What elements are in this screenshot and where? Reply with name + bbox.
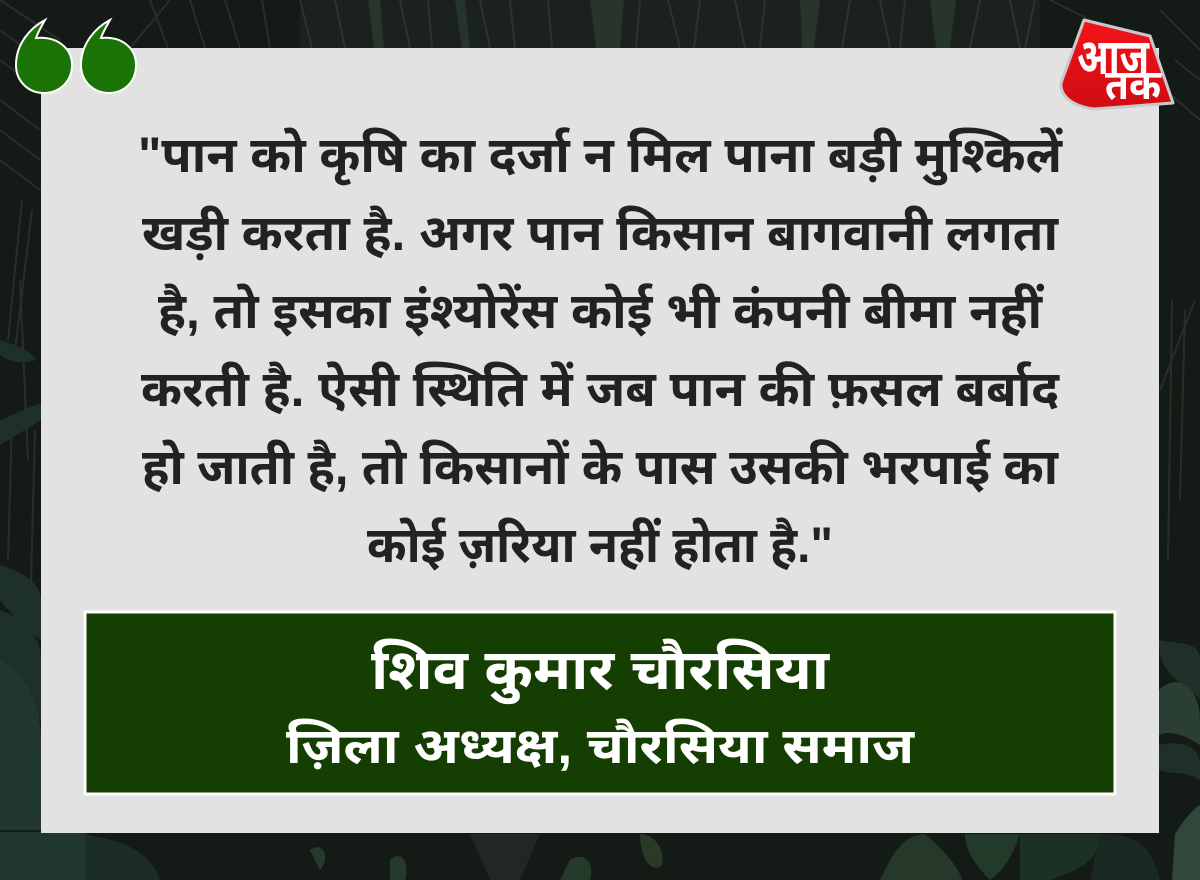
logo: Aaj Tak: तक (1105, 61, 1162, 108)
logo: Aaj Tak: आज (1077, 29, 1150, 85)
quote text: कोई ज़रिया नहीं होता है." (367, 517, 833, 573)
speaker title: ज़िला अध्यक्ष, चौरसिया समाज (286, 718, 916, 774)
quote text: करती है. ऐसी स्थिति में जब पान की फ़सल बर्बाद (141, 361, 1060, 417)
quote text (138, 127, 1063, 573)
quote text: खड़ी करता है. अगर पान किसान बागवानी लगता (142, 205, 1059, 261)
name banner (85, 612, 1115, 794)
speaker name: शिव कुमार चौरसिया (371, 638, 831, 705)
logo: Aaj Tak (1061, 20, 1173, 109)
icon: quotation marks (16, 20, 136, 93)
quote text: है, तो इसका इंश्योरेंस कोई भी कंपनी बीमा नहीं (158, 283, 1044, 339)
quote text: हो जाती है, तो किसानों के पास उसकी भरपाई का (142, 439, 1059, 495)
quote text: "पान को कृषि का दर्जा न मिल पाना बड़ी मुश्किलें (138, 127, 1063, 187)
